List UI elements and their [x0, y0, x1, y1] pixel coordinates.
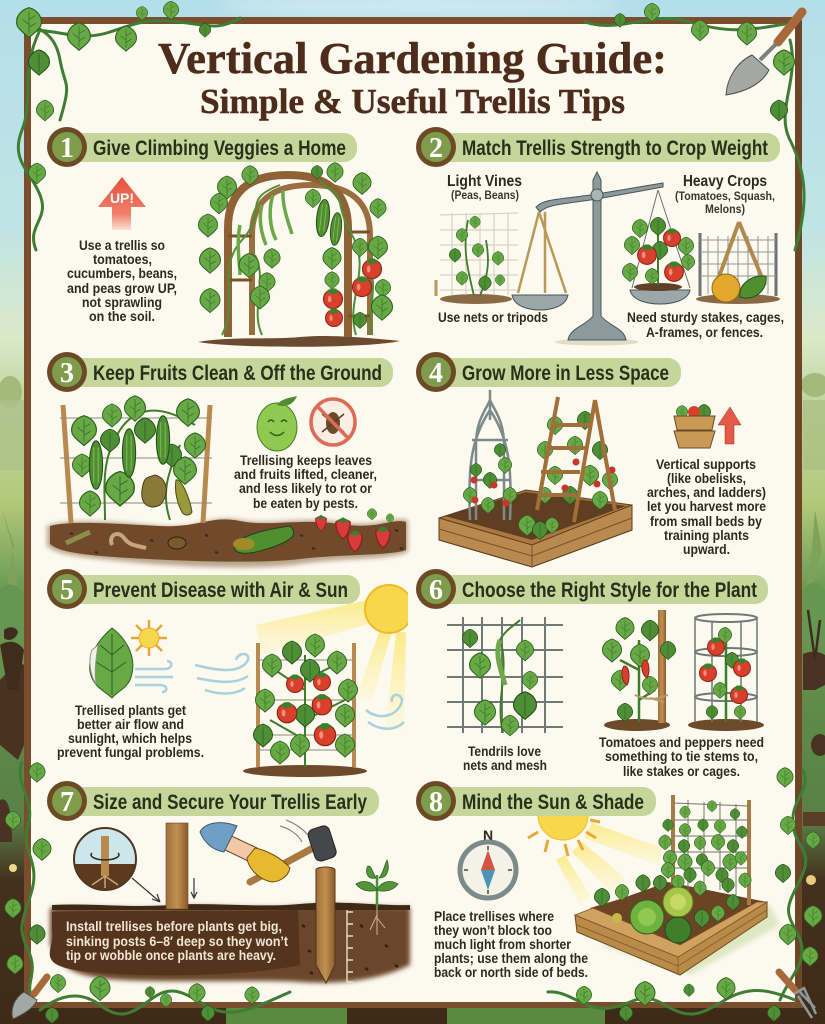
heading 4: [416, 352, 681, 392]
illustration: pointed stake with ruler: [316, 867, 353, 983]
text: place trellises: back or north side of beds.: [434, 964, 588, 980]
text: tomatoes and peppers: [599, 734, 764, 779]
illustration: sun rays: [256, 575, 414, 730]
illustration: wooden post: [166, 823, 188, 909]
heading 1: Give Climbing Veggies a Home: [93, 137, 346, 160]
text: tendrils love nets: Tendrils love: [468, 743, 541, 759]
illustration: fence and A-frame with squash: [696, 222, 780, 304]
label: heavy crops: (Tomatoes, Squash,: [675, 189, 775, 203]
text: vertical supports: training plants: [664, 527, 749, 543]
panel: section 3 keep fruits clean: [47, 352, 408, 567]
title: Simple & Useful Trellis Tips: [200, 82, 625, 121]
label: light vines: (Peas, Beans): [451, 188, 519, 202]
panel: section 8 sun and shade: [416, 781, 780, 980]
text: trellis instructions: [67, 237, 177, 324]
text: trellis instructions: and peas grow UP,: [67, 280, 177, 296]
text: vertical supports: (like obelisks,: [667, 470, 746, 486]
icon: healthy leaf: [90, 628, 133, 698]
text: trellising benefits: and fruits lifted, cleaner,: [234, 466, 377, 482]
panel: section 6 choose style: [416, 569, 768, 779]
icon: compass: N: [483, 827, 493, 843]
heading 3: Keep Fruits Clean & Off the Ground: [93, 362, 382, 385]
illustration: arch trellis with vines: [198, 163, 400, 347]
icon: garden trowel: [726, 12, 802, 95]
icon: small wind: [135, 661, 173, 692]
illustration: seedling: [356, 860, 398, 935]
text: vertical supports: [647, 456, 766, 557]
text: trellising benefits: [234, 452, 377, 511]
heading 7: [47, 781, 379, 821]
heading 7: 7: [60, 787, 74, 818]
illustration: net with pea vines: [436, 213, 518, 304]
text: need sturdy stakes: Need sturdy stakes, cages,: [627, 309, 784, 325]
title: Vertical Gardening Guide:: [158, 34, 667, 83]
heading 8: 8: [429, 787, 443, 818]
text: install trellises: Install trellises before plants get big,: [66, 918, 282, 934]
illustration: soil with rotting fruit and pests: [47, 508, 408, 567]
illustration: tomato cage: [688, 614, 764, 731]
label: heavy crops: Heavy Crops: [683, 173, 767, 190]
text: place trellises: they won’t block too: [434, 922, 552, 938]
text: place trellises: plants; use them along the: [434, 950, 588, 966]
panel: section 1 climbing veggies: [47, 127, 400, 347]
illustration: raised bed with trellis: [575, 795, 780, 975]
border vines lower left: [5, 762, 290, 1023]
icon: smiling apple: [257, 396, 297, 451]
text: place trellises: [434, 908, 588, 980]
heading 3: 3: [60, 358, 74, 389]
text: trellising benefits: Trellising keeps leaves: [240, 452, 372, 468]
illustration: pepper plant on stake: [602, 610, 676, 731]
heading 1: 1: [60, 133, 74, 164]
heading 8: [416, 781, 656, 821]
title: [158, 34, 667, 121]
panel: section 2 trellis strength: [416, 127, 784, 346]
text: need sturdy stakes: [627, 309, 784, 340]
illustration: sun and beams: [528, 790, 662, 905]
heading 6: 6: [429, 575, 443, 606]
heading 6: [416, 569, 768, 609]
text: trellising benefits: and less likely to rot or: [239, 480, 372, 496]
heading 3: [47, 352, 393, 392]
icon: bottom garden fork: [779, 972, 816, 1018]
text: trellis instructions: tomatoes,: [93, 251, 152, 267]
heading 5: Prevent Disease with Air & Sun: [93, 579, 348, 602]
icon: baskets and red arrow: [674, 404, 741, 448]
text: vertical supports: upward.: [683, 541, 730, 557]
label: light vines: Light Vines: [447, 173, 522, 190]
illustration: tomato plant on pan: [622, 217, 695, 291]
text: trellising benefits: be eaten by pests.: [253, 495, 358, 511]
border vines top left: [17, 1, 240, 250]
text: install trellises: sinking posts 6–8′ deep so they won’t: [66, 933, 288, 949]
heading 5: 5: [60, 575, 74, 606]
label: heavy crops: Melons): [705, 202, 745, 216]
illustration: hand with hammer: [200, 820, 338, 882]
icon: root diagram circle: [74, 828, 136, 890]
icon: small sun: [131, 620, 167, 656]
text: trellis instructions: not sprawling: [82, 294, 162, 310]
text: need sturdy stakes: A-frames, or fences.: [646, 324, 763, 340]
arrow: circle to post base: [132, 878, 160, 902]
heading 4: Grow More in Less Space: [462, 362, 669, 385]
text: trellis instructions: cucumbers, beans,: [67, 265, 177, 281]
icon: red up arrow: UP!: [110, 190, 134, 206]
text: trellised plants: better air flow and: [77, 716, 184, 732]
heading 2: 2: [429, 133, 443, 164]
text: trellised plants: Trellised plants get: [75, 702, 186, 718]
icon: bottom trowel: [12, 977, 47, 1019]
icon: large wind: [195, 654, 248, 694]
heading 8: Mind the Sun & Shade: [462, 791, 644, 814]
heading 5: [47, 569, 360, 609]
text: vertical supports: from small beds by: [650, 513, 762, 529]
text: install trellises: [66, 918, 288, 963]
panel: section 5 prevent disease: [47, 569, 414, 777]
text: tendrils love nets: nets and mesh: [463, 757, 547, 773]
text: tendrils love nets: [463, 743, 547, 773]
text: tomatoes and peppers: Tomatoes and peppers need: [599, 734, 764, 750]
heading 2: [416, 127, 780, 167]
heading 4: 4: [429, 358, 443, 389]
label: light vines: [447, 173, 522, 202]
text: tomatoes and peppers: like stakes or cages.: [623, 763, 740, 779]
border vines lower right: [548, 768, 822, 1021]
text: vertical supports: arches, and ladders): [647, 484, 766, 500]
text: install trellises: tip or wobble once plants are heavy.: [66, 947, 276, 963]
text: vertical supports: let you harvest more: [647, 498, 766, 514]
illustration: balance scale: [512, 172, 690, 346]
panel: section 7 size and secure: [47, 781, 410, 983]
text: trellised plants: prevent fungal problems.: [57, 744, 204, 760]
panel: section 4 grow more in less space: [416, 352, 766, 567]
text: vertical supports: Vertical supports: [656, 456, 756, 472]
text: use nets or tripods: Use nets or tripods: [438, 309, 548, 325]
illustration: tomato trellis: [243, 634, 367, 777]
text: place trellises: much light from shorter: [434, 936, 571, 952]
label: heavy crops: [675, 173, 775, 216]
text: tomatoes and peppers: something to tie stems to,: [605, 748, 758, 764]
text: trellised plants: sunlight, which helps: [68, 730, 192, 746]
illustration: raised bed with obelisk and ladder: [439, 390, 632, 567]
heading 7: Size and Secure Your Trellis Early: [93, 791, 367, 814]
heading 6: Choose the Right Style for the Plant: [462, 579, 757, 602]
text: trellised plants: [57, 702, 204, 760]
illustration: mesh with tendrils: [447, 617, 563, 736]
icon: compass: [460, 827, 516, 898]
icon: red up arrow: [98, 177, 146, 230]
illustration: cucumber trellis: [60, 396, 212, 523]
border vines top right: [585, 3, 804, 250]
text: place trellises: Place trellises where: [434, 908, 554, 924]
heading 1: [47, 127, 357, 167]
illustration: post in soil: [50, 903, 410, 983]
text: trellis instructions: Use a trellis so: [79, 237, 165, 253]
arrow: down: [191, 878, 197, 898]
icon: right wind: [366, 695, 404, 729]
text: trellis instructions: on the soil.: [89, 308, 155, 324]
icon: no pests sign: [311, 399, 355, 445]
